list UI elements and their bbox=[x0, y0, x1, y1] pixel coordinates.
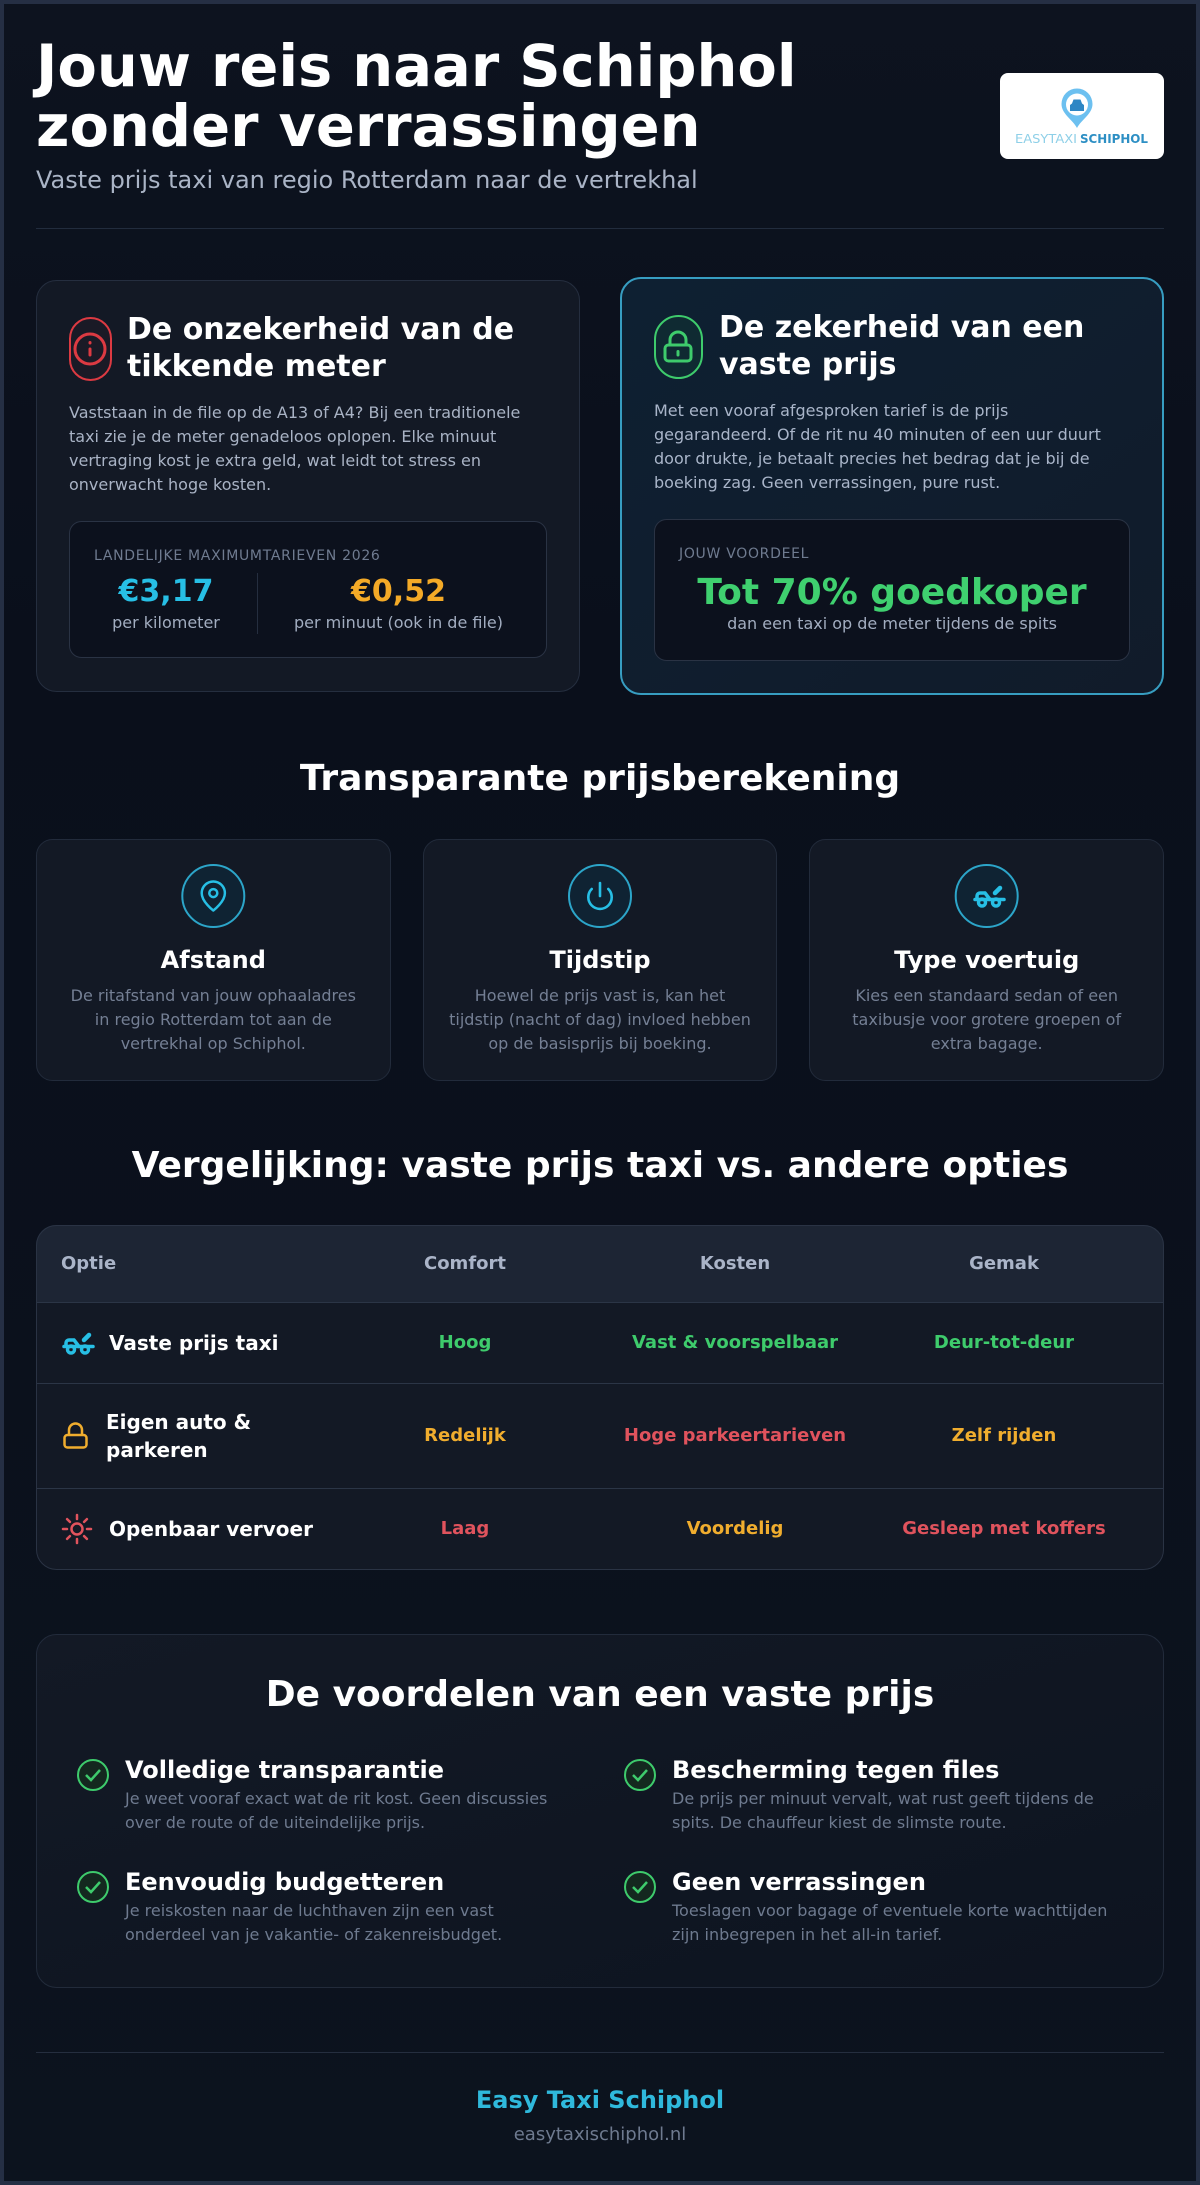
card text bbox=[852, 986, 1121, 1053]
row: eigen auto: Redelijk bbox=[424, 1425, 507, 1446]
row: openbaar vervoer: Laag bbox=[441, 1518, 489, 1539]
panel heading: De voordelen van een vaste prijs bbox=[266, 1674, 934, 1715]
row: eigen auto: parkeren bbox=[106, 1438, 208, 1462]
card text bbox=[449, 986, 751, 1053]
table header: Optie bbox=[61, 1253, 116, 1274]
benefit: transparantie bbox=[78, 1756, 547, 1832]
section heading: Vergelijking: vaste prijs taxi vs. andere opties bbox=[132, 1145, 1068, 1186]
tariff per minute: per minuut (ook in de file) bbox=[294, 613, 503, 632]
card text: in regio Rotterdam tot aan de bbox=[95, 1010, 332, 1029]
tariff per km bbox=[112, 574, 220, 632]
benefit: budgetteren: Eenvoudig budgetteren bbox=[125, 1868, 444, 1896]
row: openbaar vervoer: Voordelig bbox=[687, 1518, 783, 1539]
icon: lock bbox=[655, 316, 702, 378]
card text: op de basisprijs bij boeking. bbox=[488, 1034, 712, 1053]
row: openbaar vervoer: Gesleep met koffers bbox=[902, 1518, 1106, 1539]
benefit: geen verrassingen: Toeslagen voor bagage of eventuele korte wachttijden bbox=[671, 1901, 1107, 1920]
benefit: files: Bescherming tegen files bbox=[672, 1756, 999, 1784]
benefit: budgetteren bbox=[78, 1868, 502, 1944]
card text: tijdstip (nacht of dag) invloed hebben bbox=[449, 1010, 751, 1029]
comparison table bbox=[36, 1225, 1164, 1570]
logo: EASYTAXI bbox=[1015, 131, 1077, 146]
card text: Hoewel de prijs vast is, kan het bbox=[475, 986, 725, 1005]
panel: zekerheid bbox=[621, 278, 1163, 694]
title: Jouw reis naar Schiphol bbox=[32, 33, 797, 100]
footer: Easy Taxi Schiphol bbox=[476, 2086, 724, 2114]
panel heading bbox=[719, 310, 1084, 382]
row: openbaar vervoer bbox=[63, 1515, 1106, 1543]
benefit: transparantie: Je weet vooraf exact wat de rit kost. Geen discussies bbox=[124, 1789, 547, 1808]
tariff per km: €3,17 bbox=[118, 574, 213, 609]
body text: vertraging kost je extra geld, wat leidt tot stress en bbox=[69, 451, 481, 470]
tariff per minute: €0,52 bbox=[350, 574, 446, 609]
benefit: transparantie: over de route of de uiteindelijke prijs. bbox=[125, 1813, 425, 1832]
body text: boeking zag. Geen verrassingen, pure rust. bbox=[654, 473, 1000, 492]
body text: taxi zie je de meter genadeloos oplopen. Elke minuut bbox=[69, 427, 496, 446]
benefit: budgetteren: Je reiskosten naar de luchthaven zijn een vast bbox=[124, 1901, 494, 1920]
title bbox=[32, 33, 797, 160]
row: eigen auto bbox=[64, 1410, 1056, 1462]
title: zonder verrassingen bbox=[36, 93, 701, 160]
row: vaste prijs taxi bbox=[64, 1331, 1074, 1355]
icon: pin bbox=[182, 865, 244, 927]
panel heading: vaste prijs bbox=[719, 347, 896, 382]
logo bbox=[1000, 73, 1164, 159]
table header: Kosten bbox=[700, 1253, 770, 1274]
icon: info bbox=[70, 318, 111, 380]
row: vaste prijs taxi: Vaste prijs taxi bbox=[109, 1331, 278, 1355]
card: tijdstip bbox=[424, 840, 776, 1080]
table header: Comfort bbox=[424, 1253, 506, 1274]
row: openbaar vervoer: Openbaar vervoer bbox=[109, 1517, 313, 1541]
icon: power bbox=[569, 865, 631, 927]
card text: Kies een standaard sedan of een bbox=[855, 986, 1118, 1005]
table header bbox=[61, 1253, 1040, 1274]
benefit: transparantie: Volledige transparantie bbox=[125, 1756, 444, 1784]
table header: Gemak bbox=[969, 1253, 1040, 1274]
header bbox=[32, 33, 1164, 194]
card: afstand bbox=[36, 840, 390, 1080]
card text bbox=[71, 986, 356, 1053]
footer: easytaxischiphol.nl bbox=[514, 2124, 686, 2145]
body text: door drukte, je betaalt precies het bedrag dat je bij de bbox=[654, 449, 1090, 468]
tariff per km: per kilometer bbox=[112, 613, 220, 632]
body text: Met een vooraf afgesproken tarief is de prijs bbox=[654, 401, 1008, 420]
card text: extra bagage. bbox=[931, 1034, 1043, 1053]
benefit: geen verrassingen: Geen verrassingen bbox=[672, 1868, 926, 1896]
card text: De ritafstand van jouw ophaaladres bbox=[71, 986, 356, 1005]
body text: onverwacht hoge kosten. bbox=[69, 475, 271, 494]
advantage box: JOUW VOORDEEL bbox=[678, 546, 809, 562]
card text: taxibusje voor grotere groepen of bbox=[852, 1010, 1121, 1029]
card title: Tijdstip bbox=[549, 946, 651, 974]
benefit: files bbox=[625, 1756, 1094, 1832]
row: vaste prijs taxi: Deur-tot-deur bbox=[934, 1332, 1074, 1353]
card title: Afstand bbox=[161, 946, 266, 974]
benefit: files: spits. De chauffeur kiest de slimste route. bbox=[672, 1813, 1007, 1832]
tariff box: LANDELIJKE MAXIMUMTARIEVEN 2026 bbox=[94, 548, 381, 564]
row: eigen auto: Zelf rijden bbox=[952, 1425, 1056, 1446]
row: eigen auto: Eigen auto & bbox=[106, 1410, 251, 1434]
panel heading bbox=[127, 312, 514, 384]
benefit: budgetteren: onderdeel van je vakantie- of zakenreisbudget. bbox=[125, 1925, 502, 1944]
advantage box bbox=[654, 520, 1130, 660]
benefit: geen verrassingen bbox=[625, 1868, 1107, 1944]
card text: vertrekhal op Schiphol. bbox=[121, 1034, 306, 1053]
tariff per minute bbox=[294, 574, 503, 632]
subtitle: Vaste prijs taxi van regio Rotterdam naar de vertrekhal bbox=[36, 166, 698, 194]
advantage box: dan een taxi op de meter tijdens de spits bbox=[727, 614, 1057, 633]
body text: gegarandeerd. Of de rit nu 40 minuten of een uur duurt bbox=[654, 425, 1101, 444]
body text bbox=[654, 401, 1101, 492]
row: vaste prijs taxi: Hoog bbox=[439, 1332, 491, 1353]
card: type voertuig bbox=[810, 840, 1164, 1080]
icon: car bbox=[956, 865, 1018, 927]
panel heading: De zekerheid van een bbox=[719, 310, 1084, 345]
body text bbox=[69, 403, 520, 494]
section heading: Transparante prijsberekening bbox=[300, 758, 900, 799]
panel: voordelen bbox=[36, 1634, 1164, 1988]
row: vaste prijs taxi: Vast & voorspelbaar bbox=[632, 1332, 838, 1353]
panel: onzekerheid bbox=[36, 280, 580, 692]
panel heading: De onzekerheid van de bbox=[127, 312, 514, 347]
row: eigen auto: Hoge parkeertarieven bbox=[624, 1425, 846, 1446]
footer bbox=[476, 2086, 724, 2145]
tariff box bbox=[70, 522, 546, 658]
advantage box: Tot 70% goedkoper bbox=[697, 572, 1087, 613]
logo: SCHIPHOL bbox=[1080, 131, 1148, 146]
panel heading: tikkende meter bbox=[127, 349, 386, 384]
card title: Type voertuig bbox=[894, 946, 1079, 974]
body text: Vaststaan in de file op de A13 of A4? Bij een traditionele bbox=[69, 403, 520, 422]
benefit: files: De prijs per minuut vervalt, wat rust geeft tijdens de bbox=[672, 1789, 1094, 1808]
benefit: geen verrassingen: zijn inbegrepen in het all-in tarief. bbox=[672, 1925, 942, 1944]
